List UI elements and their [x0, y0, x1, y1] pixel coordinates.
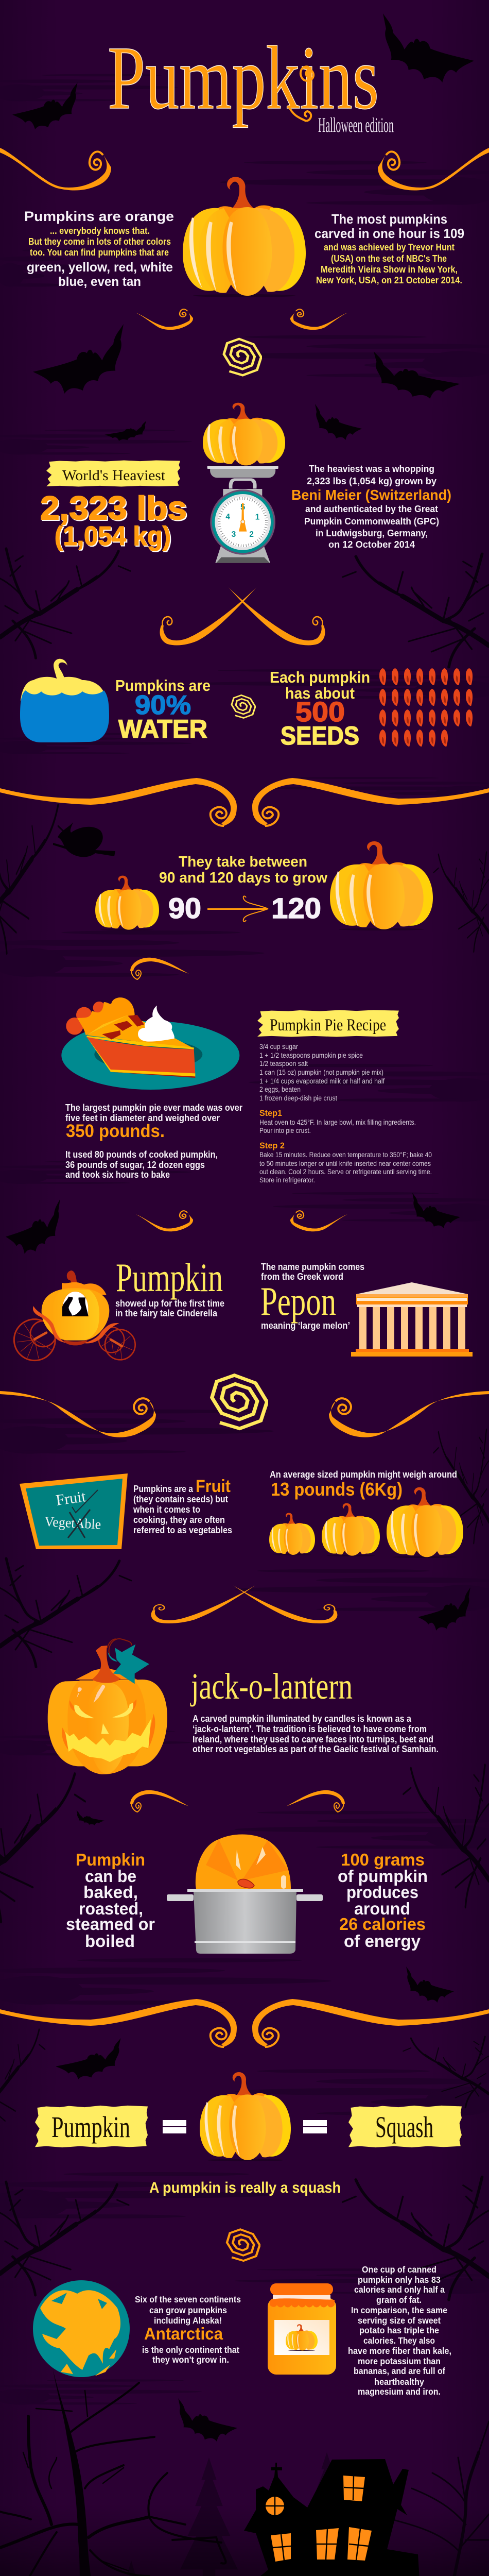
- text: most pumpkins carved: (USA) on the set of NBC's The: [331, 253, 447, 264]
- text: heaviest details: in Ludwigsburg, Germany,: [316, 528, 428, 538]
- text: 100 grams: of pumpkin: [338, 1867, 428, 1886]
- haunted house: [216, 2459, 468, 2576]
- background bare trees: [0, 549, 489, 2300]
- text: continents: Six of the seven continents: [135, 2294, 241, 2304]
- icon: big pumpkin: [330, 841, 433, 930]
- text: largest pie: 36 pounds of sugar, 12 dozen eggs: [65, 1159, 205, 1170]
- text: heaviest details: Beni Meier (Switzerland): [291, 487, 451, 503]
- small curl arch pair: [130, 1790, 345, 1812]
- banner: pumpkin pie recipe: [257, 1010, 399, 1037]
- text: days to grow: [159, 854, 327, 886]
- text: days to grow: They take between: [179, 854, 307, 870]
- icon: chalkboard fruit vegetable: [20, 1473, 128, 1549]
- text: 100 grams: 26 calories: [339, 1914, 426, 1934]
- crossed curls 2: [151, 1585, 337, 1623]
- icon: chalkboard fruit vegetable: VegetAble: [44, 1514, 101, 1532]
- icon: cinderella carriage: [14, 1270, 135, 1361]
- text: 90% water: Pumpkins are: [115, 676, 211, 694]
- text: largest pie: and took six hours to bake: [65, 1169, 170, 1180]
- recipe text: Store in refrigerator.: [259, 1176, 315, 1184]
- text: 100 grams: produces: [346, 1883, 418, 1902]
- text: 500 seeds: Each pumpkin: [270, 668, 370, 686]
- weight figures: 2,323 lbs: [40, 489, 187, 527]
- text: really a squash: A pumpkin is really a squash: [149, 2179, 341, 2196]
- curl pair top: [0, 148, 489, 191]
- curl pair with spiral: [0, 1391, 489, 1437]
- text: 500 seeds: SEEDS: [281, 721, 359, 750]
- text: canned pumpkin: magnesium and iron.: [358, 2386, 441, 2397]
- weight figures: (1,054 kg): [55, 521, 171, 551]
- text: pumpkin cinderella: showed up for the first time: [115, 1298, 224, 1309]
- text: pumpkins are a fruit: referred to as vegetables: [133, 1524, 232, 1535]
- text: continents: [135, 2294, 241, 2365]
- text: largest pie: [65, 1102, 242, 1180]
- text: pepon: The name pumpkin comes: [261, 1261, 364, 1272]
- text: pumpkins are a fruit: when it comes to: [133, 1504, 200, 1515]
- banner: world's heaviest: World's Heaviest: [62, 467, 165, 484]
- recipe text: out clean. Cool 2 hours. Serve or refrigerate until serving time.: [259, 1168, 432, 1176]
- text: largest pie: 350 pounds.: [66, 1121, 165, 1141]
- recipe text: Bake 15 minutes. Reduce oven temperature to 350°F; bake 40: [259, 1151, 432, 1159]
- icon: three pumpkins: [269, 1487, 463, 1558]
- text: pumpkin can be baked: baked,: [83, 1883, 138, 1902]
- banner: pumpkin pie recipe: Pumpkin Pie Recipe: [270, 1016, 386, 1035]
- recipe text: 1 + 1/2 teaspoons pumpkin pie spice: [259, 1052, 363, 1059]
- text: pumpkin cinderella: [115, 1255, 224, 1318]
- text: pumpkin can be baked: roasted,: [79, 1899, 143, 1918]
- text: 100 grams: of energy: [344, 1931, 421, 1951]
- text: 500 seeds: 500: [295, 697, 345, 727]
- text: most pumpkins carved: and was achieved by Trevor Hunt: [324, 242, 455, 252]
- text: canned pumpkin: calories. They also: [363, 2335, 435, 2346]
- text: pumpkin can be baked: Pumpkin: [76, 1850, 145, 1869]
- icon: small pumpkin: [95, 876, 159, 930]
- text: most pumpkins carved: carved in one hour is 109: [315, 226, 464, 241]
- recipe text: 1 + 1/4 cups evaporated milk or half and half: [259, 1077, 385, 1085]
- crossed curls 1: [160, 587, 325, 645]
- text: pumpkins are a fruit: (they contain seeds) but: [133, 1494, 228, 1504]
- icon: globe: [33, 2280, 130, 2377]
- icon: pie slice on plate: [61, 997, 239, 1090]
- text: pumpkins are a fruit: cooking, they are often: [133, 1514, 225, 1525]
- icon: main pumpkin: [183, 177, 306, 297]
- text: heaviest details: 2,323 lbs (1,054 kg) grown by: [307, 476, 437, 486]
- icon: pumpkin on scale: [203, 403, 285, 563]
- text: pumpkins are a fruit: Pumpkins are a: [133, 1483, 194, 1494]
- recipe text: Step 2: [259, 1141, 285, 1150]
- icon: pumpkin on scale: 5: [240, 502, 245, 512]
- text: average weight: An average sized pumpkin might weigh around: [270, 1469, 457, 1480]
- foreground big tree: [0, 2370, 226, 2576]
- recipe text: 3/4 cup sugar: [259, 1043, 298, 1050]
- text: pumpkins are orange: [24, 209, 174, 289]
- text: jack-o-lantern: other root vegetables as part of the Gaelic festival of Samhain.: [193, 1743, 439, 1754]
- text: pumpkins are orange: ... everybody knows that.: [50, 226, 150, 236]
- text: pumpkins are orange: green, yellow, red, white: [27, 260, 173, 275]
- text: most pumpkins carved: [315, 211, 464, 285]
- recipe text: 2 eggs, beaten: [259, 1086, 301, 1093]
- orange spiral: [217, 2224, 267, 2267]
- text: heaviest details: The heaviest was a whopping: [309, 463, 434, 474]
- text: 90% water: [115, 676, 211, 743]
- text: canned pumpkin: pumpkin only has 83: [358, 2275, 441, 2285]
- text: pumpkins are orange: But they come in lots of other colors: [28, 236, 171, 247]
- text: canned pumpkin: gram of fat.: [376, 2295, 422, 2305]
- text: canned pumpkin: serving size of sweet: [358, 2315, 441, 2326]
- text: continents: can grow pumpkins: [149, 2305, 227, 2315]
- text: heaviest details: Pumpkin Commonwealth (GPC): [304, 516, 439, 527]
- witch silhouette: [53, 822, 115, 857]
- text: 100 grams: 100 grams: [341, 1850, 425, 1869]
- text: heaviest details: [291, 463, 451, 550]
- text: heaviest details: and authenticated by the Great: [305, 503, 438, 514]
- text: pepon: meaning ‘large melon’: [261, 1320, 350, 1331]
- icon: pumpkin jar: [268, 2283, 336, 2375]
- recipe text: 1 can (15 oz) pumpkin (not pumpkin pie mix): [259, 1069, 383, 1076]
- small yellow spiral: [224, 691, 260, 723]
- icon: pumpkin in pot: [167, 1834, 323, 1954]
- weight figures: [40, 489, 188, 552]
- recipe text: Pour into pie crust.: [259, 1127, 311, 1134]
- recipe text: 1/2 teaspoon salt: [259, 1060, 308, 1067]
- banner: squash: Squash: [375, 2110, 433, 2144]
- bottom fade to black: [0, 2504, 489, 2576]
- recipe text: Step1: [259, 1108, 282, 1118]
- icon: pumpkin on scale: 4: [225, 513, 230, 521]
- text: 500 seeds: [270, 668, 370, 750]
- text: most pumpkins carved: The most pumpkins: [331, 211, 447, 227]
- recipe text: Heat oven to 425°F. In large bowl, mix filling ingredients.: [259, 1118, 416, 1126]
- big yellow spiral: [195, 1365, 280, 1440]
- text: jack-o-lantern: ‘jack-o-lantern’. The tradition is believed to have come from: [193, 1723, 427, 1734]
- banner: world's heaviest: [46, 461, 180, 486]
- text: largest pie: It used 80 pounds of cooked pumpkin,: [65, 1149, 218, 1160]
- text: pumpkin can be baked: can be: [85, 1867, 136, 1886]
- text: most pumpkins carved: New York, USA, on 21 October 2014.: [316, 275, 462, 285]
- text: heaviest details: on 12 October 2014: [328, 539, 415, 550]
- text: largest pie: The largest pumpkin pie ever made was over: [65, 1102, 242, 1113]
- banner: squash: [348, 2106, 462, 2147]
- text: canned pumpkin: bananas, and are full of: [354, 2366, 445, 2376]
- icon: chalkboard fruit vegetable: Fruit: [55, 1488, 87, 1509]
- text: pumpkin can be baked: [66, 1850, 155, 1951]
- text: pepon: Pepon: [260, 1279, 336, 1324]
- text: canned pumpkin: more potassium than: [358, 2356, 441, 2366]
- text: canned pumpkin: calories and only half a: [354, 2284, 445, 2295]
- small curl arch: [130, 958, 189, 979]
- text: average weight: [270, 1469, 457, 1500]
- text: 90% water: 90%: [135, 690, 191, 720]
- text: jack-o-lantern: Ireland, where they used to carve faces into turnips, beet and: [193, 1734, 433, 1744]
- text: canned pumpkin: One cup of canned: [362, 2264, 436, 2275]
- icon: pumpkin 90% water: [20, 659, 109, 742]
- text: continents: including Alaska!: [154, 2315, 222, 2326]
- text: canned pumpkin: potato has triple the: [359, 2325, 439, 2335]
- text: largest pie: five feet in diameter and weighed over: [65, 1112, 220, 1123]
- banner: pumpkin: Pumpkin: [51, 2110, 130, 2144]
- text: jack-o-lantern: jack-o-lantern: [190, 1666, 353, 1707]
- text: average weight: 13 pounds (6Kg): [271, 1479, 403, 1500]
- text: pumpkin can be baked: boiled: [85, 1931, 135, 1951]
- text: Halloween edition: [318, 113, 394, 137]
- text: most pumpkins carved: Meredith Vieira Show in New York,: [321, 264, 458, 275]
- text: jack-o-lantern: [190, 1666, 439, 1754]
- text: 100 grams: [338, 1850, 428, 1951]
- 90 arrow 120: 120: [271, 892, 321, 924]
- recipe text: to 50 minutes longer or until knife inserted near center comes: [259, 1160, 431, 1167]
- recipe text: [259, 1043, 432, 1184]
- icon: center pumpkin: [200, 2072, 291, 2161]
- weight figures: (1,054 kg): [56, 522, 172, 552]
- text: pepon: [260, 1261, 364, 1331]
- icon: pumpkin on scale: 1: [255, 513, 260, 522]
- text: 500 seeds: has about: [285, 684, 355, 702]
- text: pumpkins are a fruit: Fruit: [196, 1477, 231, 1496]
- text: pepon: from the Greek word: [261, 1271, 343, 1282]
- foreground right tree: [391, 2421, 489, 2576]
- text: pumpkins are orange: Pumpkins are orange: [24, 209, 174, 224]
- banner: pumpkin: [35, 2106, 148, 2147]
- title: Pumpkins: [108, 28, 379, 128]
- text: pumpkin can be baked: steamed or: [66, 1914, 155, 1934]
- text: continents: Antarctica: [144, 2324, 223, 2343]
- weight figures: 2,323 lbs: [41, 490, 188, 528]
- text: canned pumpkin: In comparison, the same: [351, 2305, 447, 2315]
- icon: jack-o-lantern: [48, 1639, 167, 1774]
- text: 100 grams: around: [354, 1899, 410, 1918]
- text: pumpkin cinderella: Pumpkin: [116, 1255, 223, 1300]
- icon: greek temple: [351, 1282, 473, 1357]
- recipe text: 1 frozen deep-dish pie crust: [259, 1094, 337, 1102]
- text: continents: is the only continent that: [142, 2345, 239, 2355]
- text: pumpkins are a fruit: [133, 1477, 232, 1535]
- 90 arrow 120: [168, 892, 321, 924]
- 90 arrow 120: 90: [168, 892, 201, 924]
- small curl pair 2: [136, 1211, 347, 1231]
- text: jack-o-lantern: A carved pumpkin illuminated by candles is known as a: [193, 1713, 412, 1724]
- text: pumpkin cinderella: in the fairy tale Cinderella: [115, 1308, 218, 1318]
- text: days to grow: 90 and 120 days to grow: [159, 870, 327, 886]
- icon: pumpkin on scale: 3: [232, 530, 236, 539]
- equals sign right: [303, 2120, 327, 2133]
- big curl pair 1: [0, 778, 489, 826]
- icon: pumpkin on scale: 2: [249, 530, 254, 539]
- text: pumpkins are orange: blue, even tan: [58, 275, 141, 289]
- yellow spiral: [213, 332, 270, 383]
- text: canned pumpkin: have more fiber than kale,: [348, 2346, 451, 2356]
- text: continents: they won't grow in.: [152, 2354, 229, 2365]
- big curl pair 2: [0, 1999, 489, 2047]
- background pines: [11, 2452, 348, 2576]
- text: canned pumpkin: hearthealthy: [374, 2377, 424, 2387]
- text: 90% water: WATER: [118, 715, 207, 743]
- equals sign left: [163, 2120, 186, 2133]
- text: canned pumpkin: [348, 2264, 451, 2397]
- seeds grid: [379, 668, 473, 747]
- small curl pair: [136, 309, 347, 330]
- text: pumpkins are orange: too. You can find pumpkins that are: [30, 247, 169, 258]
